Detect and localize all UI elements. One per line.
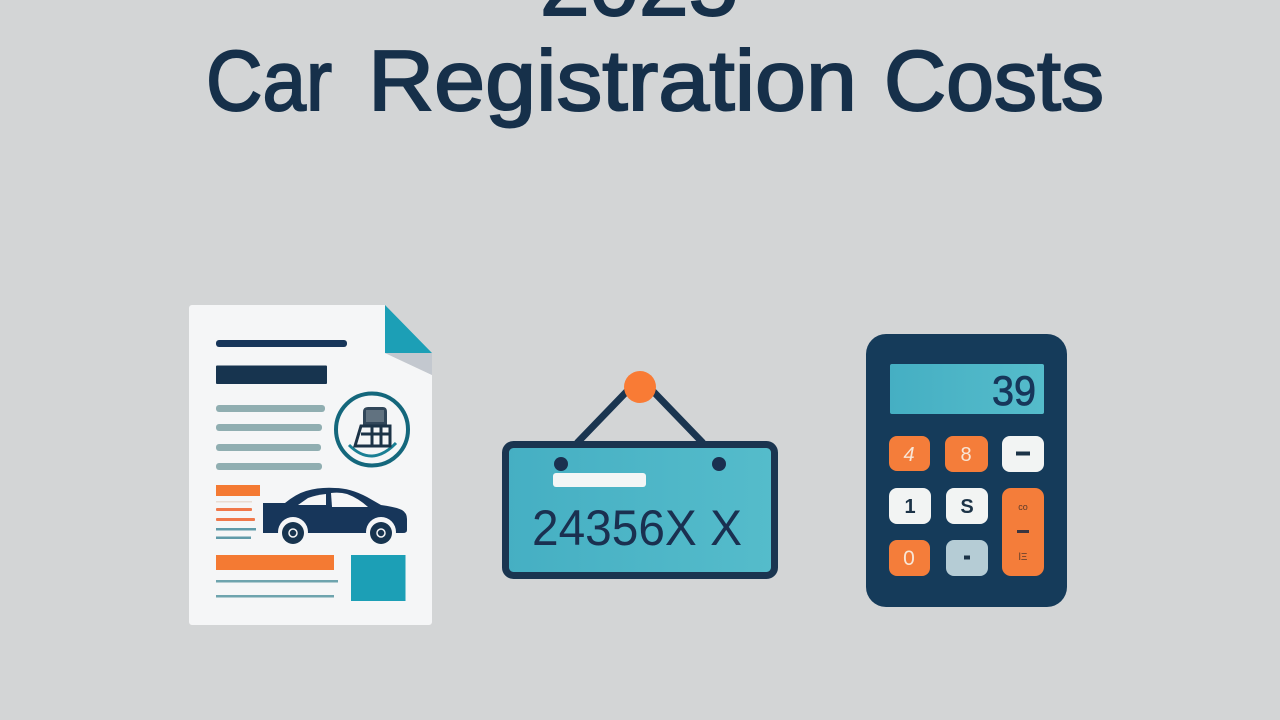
screen digits: 39: [992, 367, 1036, 414]
heading lines: [216, 340, 347, 384]
button row 2: 1: [904, 496, 916, 518]
calculator body: [866, 334, 1067, 607]
plate number: 24356X X: [532, 500, 742, 556]
hanging strings: [577, 386, 703, 443]
page fold shadow: [385, 353, 432, 375]
button row 1: [889, 436, 1044, 472]
teal lines: [216, 580, 338, 598]
icon: calculator: [866, 334, 1067, 607]
plate white label: [553, 473, 646, 487]
document page: [189, 305, 432, 625]
tall orange key: co: [1018, 502, 1028, 512]
title: main heading: Registration: [368, 34, 857, 129]
teal square: [351, 555, 406, 601]
small text lines beside car: [216, 485, 260, 539]
grey text lines: [216, 405, 325, 470]
plate body: [506, 444, 774, 576]
car: [263, 488, 407, 547]
title: [206, 0, 1104, 129]
button row 1: 4: [903, 444, 915, 466]
tall orange key: lΞ: [1019, 552, 1028, 563]
button row 2: [889, 488, 988, 524]
round car seal: [336, 394, 408, 466]
orange bar: [216, 555, 334, 570]
button row 3: 0: [903, 547, 915, 570]
calculator screen: [890, 364, 1044, 414]
hanging pin: [624, 371, 656, 403]
tall orange key: [1002, 488, 1044, 576]
page fold: [385, 305, 432, 353]
icon: registration document: [189, 305, 432, 625]
plate holes: [554, 457, 726, 471]
title: main heading: Costs: [884, 34, 1104, 129]
icon: hanging licence plate: [506, 371, 774, 576]
button row 3: [889, 540, 988, 576]
button row 2: S: [960, 496, 974, 518]
title: main heading: Car: [206, 34, 332, 129]
button row 1: 8: [960, 444, 972, 466]
